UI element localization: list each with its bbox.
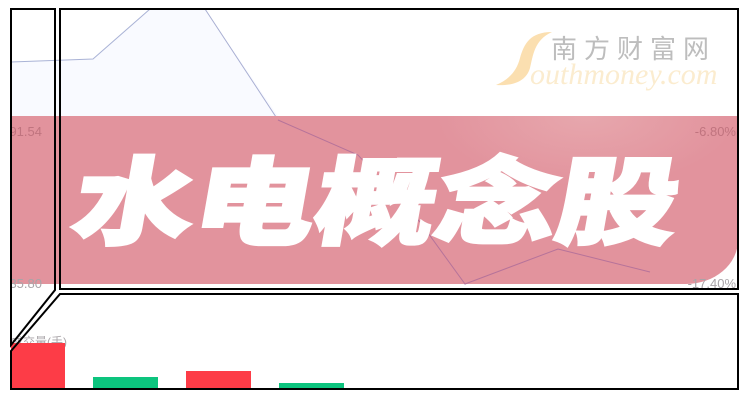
banner: pink title band <box>11 116 738 284</box>
line chart: segment over the banner <box>278 120 650 285</box>
axis label: top right percent: -6.80% <box>695 124 736 139</box>
axis label: volume: 成交量(手) <box>11 335 67 349</box>
logo domain: outhmoney.com <box>530 58 717 91</box>
logo Chinese name: 南方财富网 <box>551 29 716 66</box>
axis label: bottom right percent: -17.40% <box>688 276 736 291</box>
logo swoosh <box>496 32 552 86</box>
bar chart: volume bars <box>11 343 344 388</box>
logo: southmoney watermark <box>496 29 717 91</box>
title: 水电概念股 <box>64 126 692 264</box>
